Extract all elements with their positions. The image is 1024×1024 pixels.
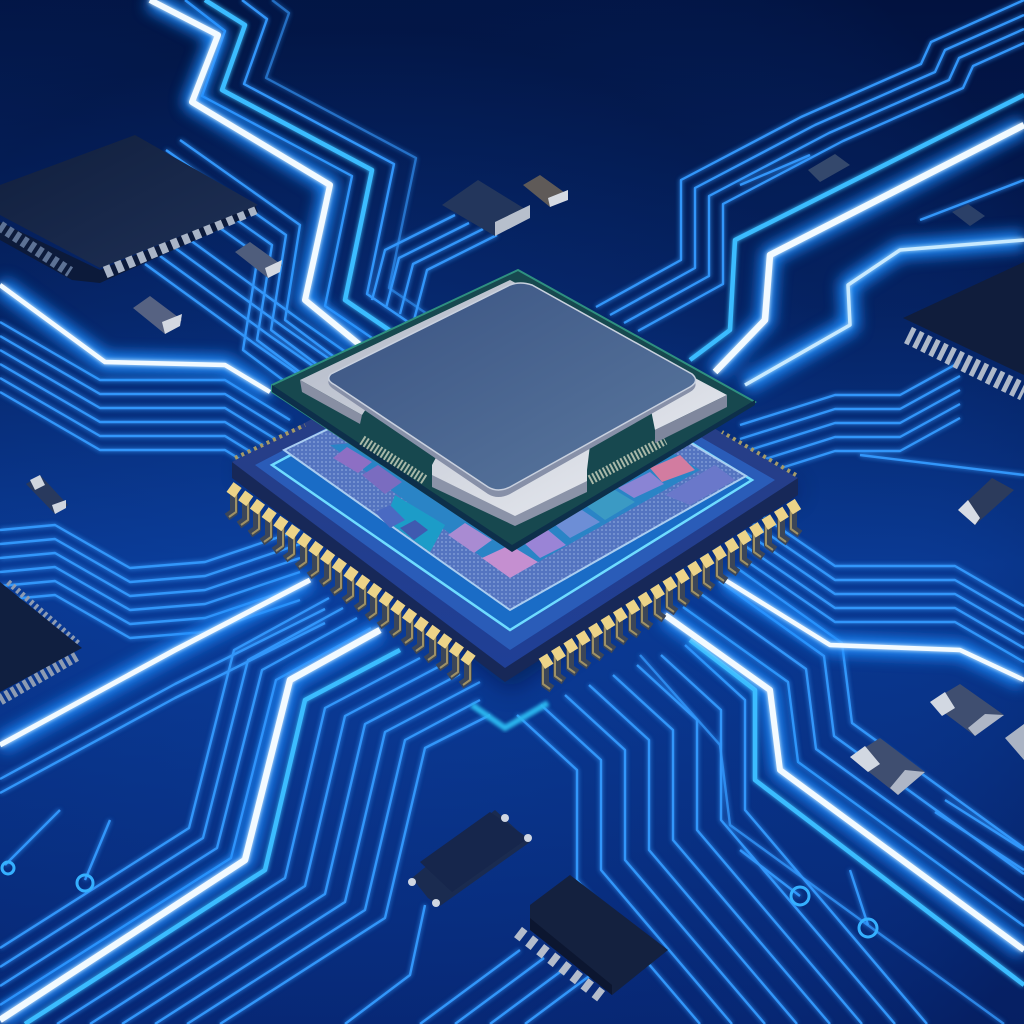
component: lower right resistor 2 (850, 738, 925, 795)
component: top capacitor (442, 180, 530, 236)
upper substrate (272, 270, 755, 550)
component: left resistor 3 (26, 475, 68, 514)
central processor (227, 270, 800, 689)
package substrate (232, 310, 798, 682)
chip: bottom package small (408, 810, 532, 907)
component: left resistor 2 (133, 296, 182, 334)
gold pin heads (230, 487, 798, 665)
component: left resistor 1 (235, 242, 282, 278)
via pads (2, 862, 877, 937)
component: lower right resistor 1 (930, 684, 1004, 736)
chip: left processor (0, 582, 82, 700)
component: right resistor (958, 478, 1014, 525)
small components (26, 154, 1024, 795)
contact pads on substrate (362, 440, 665, 480)
component: edge resistor (1005, 724, 1024, 760)
silver heat spreader (300, 280, 727, 526)
component: upper right small (952, 204, 985, 226)
top edge contacts (235, 425, 796, 475)
cyan reflection under chip (472, 703, 548, 728)
heat spreader centre plate (328, 283, 696, 497)
chip: top-left processor (0, 135, 258, 283)
silicon die (284, 340, 746, 610)
chip: bottom package large (518, 875, 668, 1000)
central chip shadow glow (240, 340, 800, 690)
pins: right edge legs (543, 505, 800, 689)
die halo (272, 335, 752, 630)
die blocks (333, 447, 735, 578)
component: upper right resistor (808, 154, 850, 182)
chip: right processor (903, 262, 1024, 392)
component: top small capacitor (523, 175, 568, 207)
pins: left edge legs (227, 488, 470, 685)
blue ring (255, 330, 775, 650)
